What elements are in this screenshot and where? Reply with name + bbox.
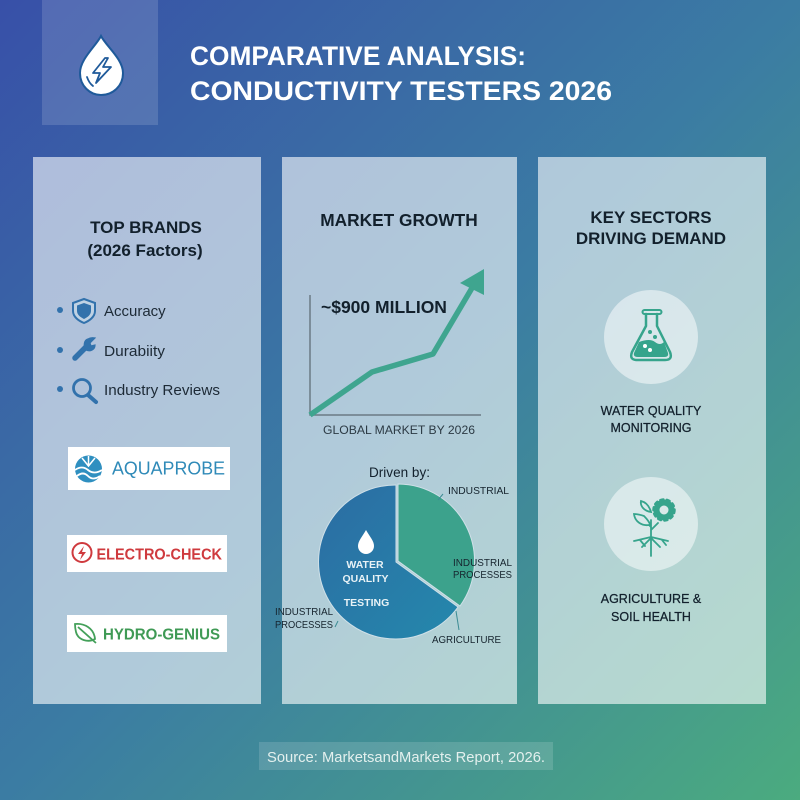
sector: agriculture	[601, 477, 702, 624]
sector: water quality	[601, 290, 702, 435]
icon: flask	[631, 310, 671, 360]
pie centre label: QUALITY	[342, 573, 389, 585]
chart caption: GLOBAL MARKET BY 2026	[323, 423, 475, 437]
source note: Source: MarketsandMarkets Report, 2026.	[267, 749, 545, 766]
factor: accuracy	[57, 299, 166, 323]
source note	[259, 742, 553, 770]
label: agriculture: SOIL HEALTH	[611, 610, 691, 624]
label: agriculture	[601, 592, 702, 624]
pie centre label: TESTING	[344, 597, 389, 609]
title	[190, 41, 612, 106]
panel: market growth	[275, 157, 517, 704]
header icon tile	[42, 0, 158, 125]
pie labels: INDUSTRIAL	[453, 558, 512, 569]
pie heading: Driven by:	[369, 464, 430, 480]
factor: accuracy: Accuracy	[104, 303, 166, 320]
heading: top brands: (2026 Factors)	[87, 241, 203, 260]
factor list	[57, 299, 220, 402]
title: COMPARATIVE ANALYSIS:	[190, 41, 526, 71]
label: water quality: MONITORING	[610, 421, 692, 435]
heading: market growth: MARKET GROWTH	[320, 210, 478, 230]
pie labels: AGRICULTURE	[432, 635, 501, 646]
logo: hydro-genius: HYDRO-GENIUS	[103, 626, 220, 644]
factor: durability: Durabiity	[104, 343, 166, 360]
icon: plant with gear and roots	[634, 500, 674, 556]
heading: key sectors: KEY SECTORS	[590, 208, 712, 227]
pie labels: INDUSTRIAL	[448, 486, 509, 497]
heading: top brands	[87, 218, 203, 260]
pie labels	[275, 486, 512, 646]
label: water quality: WATER QUALITY	[601, 404, 702, 418]
heading: key sectors: DRIVING DEMAND	[576, 229, 726, 248]
title: CONDUCTIVITY TESTERS 2026	[190, 76, 612, 106]
heading: top brands: TOP BRANDS	[90, 218, 202, 237]
pie labels: PROCESSES	[453, 570, 512, 581]
pie centre label	[342, 559, 389, 609]
panel: top brands	[33, 157, 261, 704]
factor: industry reviews: Industry Reviews	[104, 382, 220, 399]
pie centre label: WATER	[346, 559, 384, 571]
factor: industry reviews	[57, 380, 220, 402]
logo: electro-check	[67, 535, 227, 572]
logo: electro-check: ELECTRO-CHECK	[96, 546, 222, 564]
logo: aquaprobe	[68, 447, 230, 490]
pie chart	[275, 484, 512, 646]
pie labels: PROCESSES	[275, 620, 333, 631]
label: agriculture: AGRICULTURE &	[601, 592, 702, 606]
line chart	[310, 269, 484, 437]
label: water quality	[601, 404, 702, 435]
icon: white drop	[358, 530, 374, 554]
heading: key sectors	[576, 208, 726, 248]
panel: key sectors	[538, 157, 766, 704]
factor: durability	[57, 338, 166, 360]
chart value: ~$900 MILLION	[321, 297, 447, 317]
logo: hydro-genius	[67, 615, 227, 652]
pie labels: INDUSTRIAL	[275, 607, 333, 618]
icon: water drop with bolt	[80, 36, 123, 95]
logo: aquaprobe: AQUAPROBE	[112, 458, 225, 478]
